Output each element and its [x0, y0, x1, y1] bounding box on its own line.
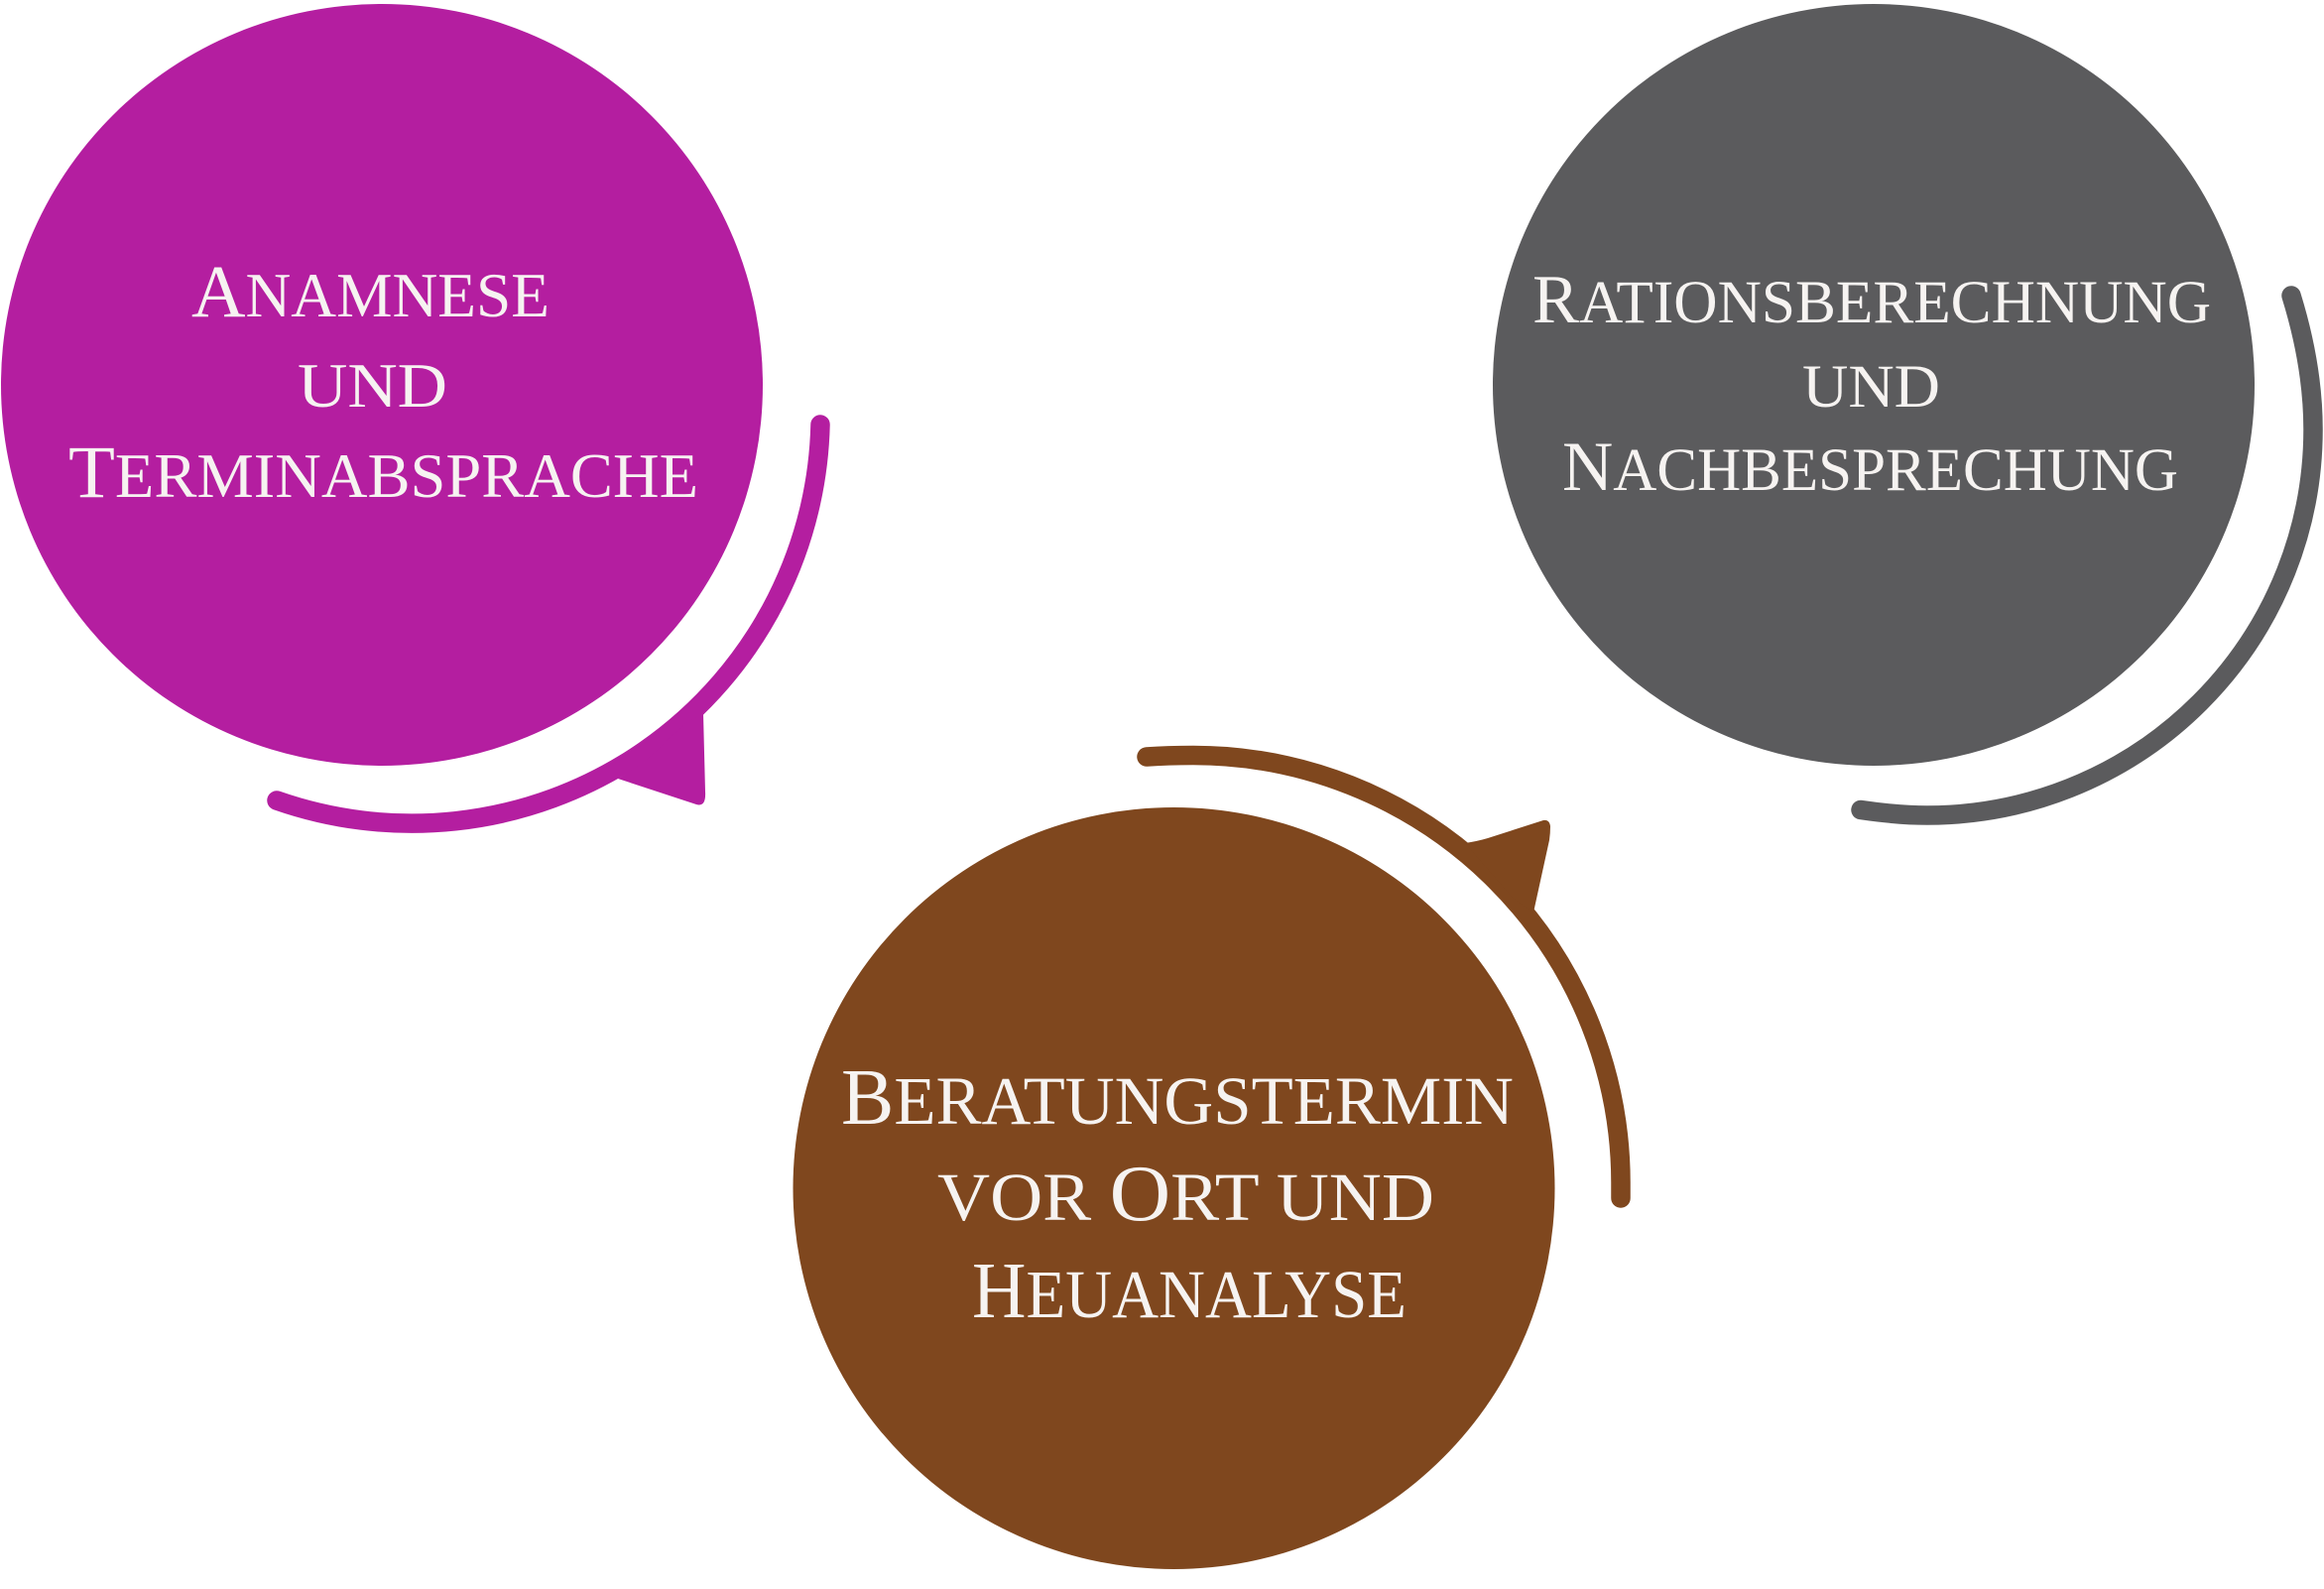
text: Beratungstermin vor Ort und Heuanalyse: BERATUNGSTERMIN: [841, 1054, 1514, 1142]
text: Beratungstermin vor Ort und Heuanalyse: [841, 1054, 1514, 1335]
text: Rationsberechnung und Nachbesprechung: UND: [1802, 354, 1940, 421]
circle: magenta: [1, 4, 763, 766]
text: Anamnese und Terminabsprache: ANAMNESE: [191, 251, 550, 333]
circle: grey: [1493, 4, 2255, 766]
text: Rationsberechnung und Nachbesprechung: RATIONSBERECHNUNG: [1532, 262, 2211, 338]
circle: brown: [794, 807, 1555, 1569]
text: Beratungstermin vor Ort und Heuanalyse: HEUANALYSE: [972, 1248, 1407, 1335]
text: Anamnese und Terminabsprache: [68, 251, 698, 514]
text: Beratungstermin vor Ort und Heuanalyse: VOR ORT UND: [937, 1151, 1434, 1238]
panel: Anamnese und Terminabsprache: [1, 4, 820, 823]
arrow: brown arc with head: [1147, 756, 1621, 1198]
arrow: magenta arc with head: [277, 425, 820, 823]
text: Anamnese und Terminabsprache: TERMINABSPRACHE: [68, 431, 698, 514]
panel: Beratungstermin vor Ort und Heuanalyse: [794, 756, 1621, 1569]
arrow: grey arc: [1861, 296, 2313, 815]
text: Rationsberechnung und Nachbesprechung: NACHBESPRECHUNG: [1562, 428, 2178, 506]
panel: Rationsberechnung und Nachbesprechung: [1493, 4, 2313, 815]
text: Anamnese und Terminabsprache: UND: [298, 351, 447, 421]
text: Rationsberechnung und Nachbesprechung: [1532, 262, 2211, 506]
